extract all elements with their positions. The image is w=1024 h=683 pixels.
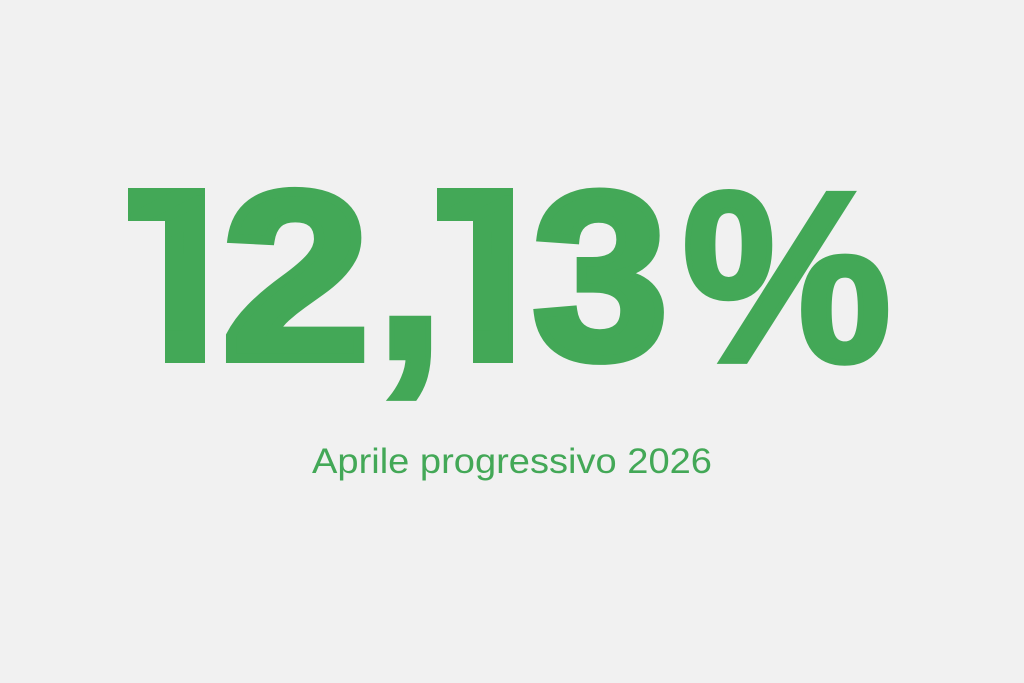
headline figure: 12,13%: 1: [118, 133, 295, 417]
headline figure: 12,13%: 1: [426, 133, 603, 417]
headline figure: 12,13%: 2: [222, 143, 370, 409]
subtitle: Aprile progressivo 2026: [312, 442, 712, 481]
headline figure: 12,13%: 3: [533, 143, 668, 408]
headline figure: 12,13%: [128, 186, 888, 401]
headline figure: 12,13%: %: [682, 141, 892, 413]
headline figure: 12,13%: ,: [374, 121, 446, 414]
